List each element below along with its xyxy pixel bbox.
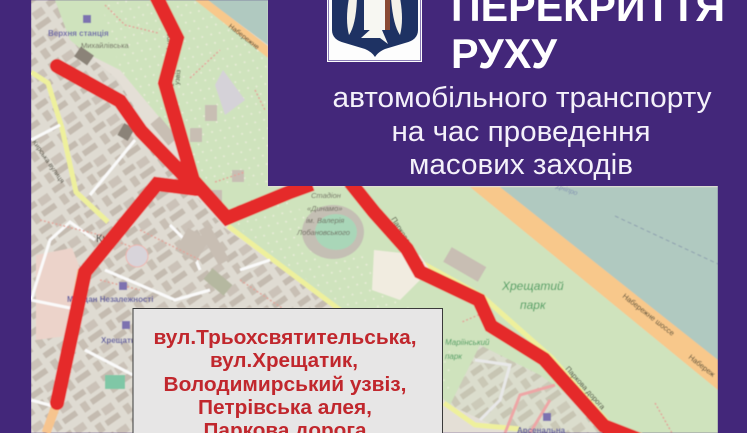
map: park path texture bbox=[100, 0, 268, 187]
right purple edge bbox=[718, 186, 747, 433]
map labels: Маріїнський bbox=[445, 338, 490, 347]
list of closed streets: Петрівська алея, bbox=[198, 396, 372, 419]
subtitle: автомобільного транспорту bbox=[332, 82, 712, 114]
map: pale pink district bbox=[36, 248, 84, 340]
map labels: Стадіон bbox=[311, 191, 341, 200]
list of closed streets: Володимирський узвіз, bbox=[164, 373, 406, 396]
metro marks bbox=[83, 15, 551, 421]
title bbox=[451, 0, 725, 77]
icon: Kyiv coat of arms bbox=[327, 0, 422, 62]
map: dense city texture bbox=[31, 0, 335, 433]
header panel bbox=[268, 0, 747, 186]
map labels: Лобановського bbox=[296, 228, 350, 237]
subtitle: масових заходів bbox=[409, 149, 633, 181]
closed streets box bbox=[133, 308, 442, 433]
map labels: Набереж bbox=[687, 352, 717, 379]
map: orange Khreshchatyk street bbox=[46, 270, 82, 433]
map labels: Верхня станція bbox=[48, 29, 109, 38]
map labels: Дніпро bbox=[554, 182, 579, 197]
subtitle bbox=[332, 82, 712, 181]
map: river fairway bbox=[615, 216, 718, 264]
list of closed streets: вул.Хрещатик, bbox=[210, 349, 358, 372]
map labels: парк bbox=[445, 352, 463, 361]
map: river Dnipro bbox=[207, 0, 268, 45]
map labels: Набережне шоссе bbox=[621, 291, 676, 338]
list of closed streets: вул.Трьохсвятительська, bbox=[154, 326, 416, 349]
map labels: Паркова дорога bbox=[564, 364, 608, 412]
map: stadium bbox=[302, 205, 364, 259]
map: yellow streets bbox=[31, 72, 610, 429]
map labels: Михайлівська bbox=[81, 41, 130, 50]
map labels: ім. Валерія bbox=[306, 216, 344, 225]
map labels: парк bbox=[520, 298, 547, 312]
map labels: Кирська вулиця bbox=[30, 139, 65, 185]
map labels: Володимирський bbox=[165, 32, 175, 87]
map labels: Набережне bbox=[227, 22, 261, 51]
map labels: Хрещатик bbox=[101, 336, 141, 345]
map: buildings bbox=[74, 46, 486, 389]
title: РУХУ bbox=[451, 30, 558, 77]
map: Arsenal pink block bbox=[505, 385, 555, 433]
map: embankment road bbox=[195, 0, 718, 390]
map labels: Паркова дорога bbox=[389, 215, 427, 267]
red closed route lines bbox=[57, 0, 640, 433]
subtitle: на час проведення bbox=[392, 116, 650, 148]
map labels: Майдан Незалежності bbox=[67, 295, 153, 304]
map labels: узвіз bbox=[173, 69, 183, 85]
map labels: Петрівська bbox=[236, 192, 272, 213]
map: round square bbox=[126, 245, 148, 267]
map labels: Хрещатий bbox=[501, 279, 564, 293]
map labels: Київ bbox=[96, 233, 118, 245]
list of closed streets bbox=[154, 326, 416, 433]
map: white lanes bbox=[31, 125, 510, 420]
map labels: «Динамо» bbox=[307, 204, 342, 213]
